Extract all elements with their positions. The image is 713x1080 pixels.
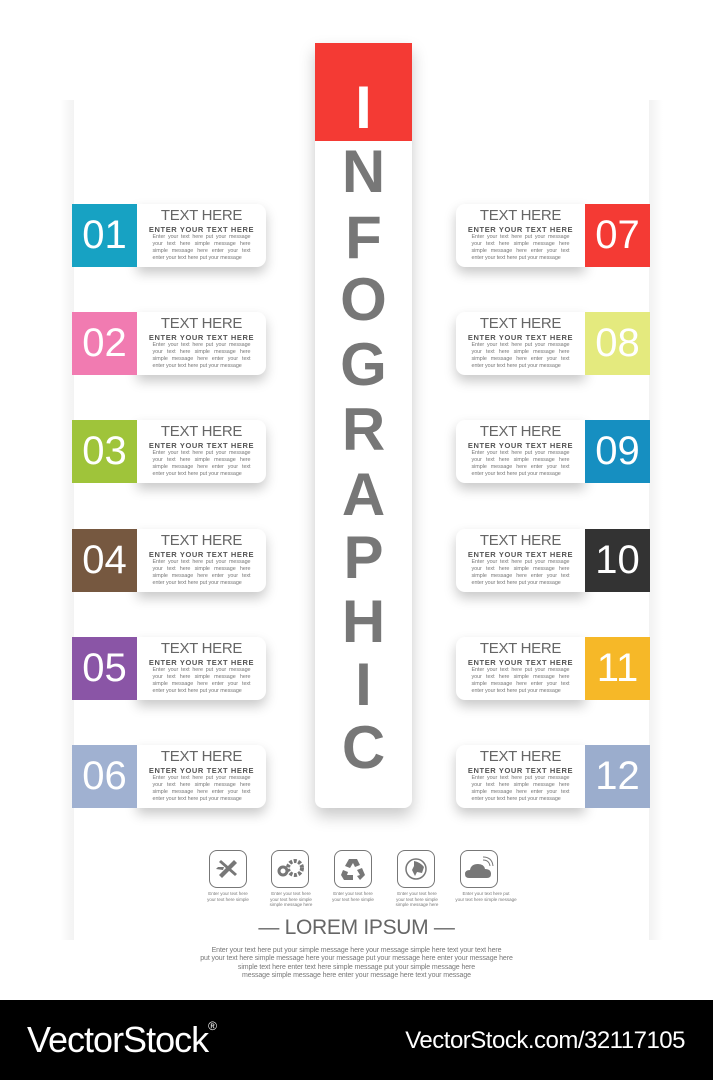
item 10: 10 xyxy=(595,538,640,582)
footer paragraph: simple text here enter text here simple message put your simple message here xyxy=(238,964,475,971)
item 12: ENTER YOUR TEXT HERE xyxy=(468,766,573,775)
title letters: I xyxy=(355,74,372,141)
item 06: TEXT HERE xyxy=(161,748,242,765)
icon row: your text here simple xyxy=(270,896,312,902)
item 07: Enter your text here put your message your text here simple message here simple message here enter your text enter your text here put your message xyxy=(472,234,570,261)
side shadows xyxy=(60,100,74,940)
item 01 xyxy=(72,204,272,279)
item 04: 04 xyxy=(82,538,127,582)
item 03: ENTER YOUR TEXT HERE xyxy=(149,441,254,450)
red header xyxy=(315,43,412,141)
item 05 xyxy=(72,637,272,712)
title column xyxy=(315,43,412,808)
item 01: Enter your text here put your message your text here simple message here simple message here enter your text enter your text here put your message xyxy=(152,234,250,261)
icon row: Enter your text here xyxy=(271,891,311,896)
title letters: R xyxy=(342,396,385,463)
item 08: ENTER YOUR TEXT HERE xyxy=(468,333,573,342)
item 03 xyxy=(72,420,272,495)
icon row: your text here simple message xyxy=(455,896,517,902)
item 07: 07 xyxy=(595,213,640,257)
item 08: Enter your text here put your message your text here simple message here simple message here enter your text enter your text here put your message xyxy=(472,342,570,369)
item 10: Enter your text here put your message your text here simple message here simple message here enter your text enter your text here put your message xyxy=(472,559,570,586)
item 09: Enter your text here put your message your text here simple message here simple message here enter your text enter your text here put your message xyxy=(472,450,570,477)
icon: gears xyxy=(271,850,309,888)
item 04: Enter your text here put your message your text here simple message here simple message here enter your text enter your text here put your message xyxy=(152,559,250,586)
title letters: A xyxy=(342,461,385,528)
item 03: 03 xyxy=(82,429,127,473)
item 12: TEXT HERE xyxy=(480,748,561,765)
footer paragraph: message simple message here enter your message here text your message xyxy=(242,972,471,979)
item 04 xyxy=(72,529,272,604)
title letters: O xyxy=(340,266,387,333)
item 09: 09 xyxy=(595,429,640,473)
item 05: ENTER YOUR TEXT HERE xyxy=(149,658,254,667)
item 01: TEXT HERE xyxy=(161,207,242,224)
item 01: ENTER YOUR TEXT HERE xyxy=(149,225,254,234)
title letters: H xyxy=(342,588,385,655)
item 11: 11 xyxy=(597,646,638,690)
item 09 xyxy=(450,420,650,495)
title letters: C xyxy=(342,714,385,781)
watermark band xyxy=(0,1000,713,1080)
text: simple message here xyxy=(396,902,438,907)
item 03: Enter your text here put your message your text here simple message here simple message here enter your text enter your text here put your message xyxy=(152,450,250,477)
footer paragraph: put your text here simple message here your message put your message here enter your message here xyxy=(200,955,513,962)
item 02: 02 xyxy=(82,321,127,365)
item 02: Enter your text here put your message your text here simple message here simple message here enter your text enter your text here put your message xyxy=(152,342,250,369)
item 08 xyxy=(450,312,650,387)
icon: globe xyxy=(397,850,435,888)
icon row: your text here simple xyxy=(396,896,438,902)
item 12: Enter your text here put your message your text here simple message here simple message here enter your text enter your text here put your message xyxy=(472,775,570,802)
text: simple message here xyxy=(270,902,312,907)
item 06: ENTER YOUR TEXT HERE xyxy=(149,766,254,775)
item 02 xyxy=(72,312,272,387)
item 07: ENTER YOUR TEXT HERE xyxy=(468,225,573,234)
icon row: your text here simple xyxy=(207,896,249,902)
icon row xyxy=(207,850,517,907)
icon: plane xyxy=(209,850,247,888)
item 08: TEXT HERE xyxy=(480,315,561,332)
watermark band: VectorStock.com/32117105 xyxy=(405,1027,685,1054)
item 06: Enter your text here put your message your text here simple message here simple message here enter your text enter your text here put your message xyxy=(152,775,250,802)
item 01: 01 xyxy=(82,213,127,257)
item 03: TEXT HERE xyxy=(161,423,242,440)
title letters: N xyxy=(342,138,385,205)
item 06: 06 xyxy=(82,754,127,798)
item 11 xyxy=(450,637,650,712)
item 11: Enter your text here put your message your text here simple message here simple message here enter your text enter your text here put your message xyxy=(472,667,570,694)
icon row: Enter your text here xyxy=(208,891,248,896)
title letters: P xyxy=(343,524,384,591)
item 04: ENTER YOUR TEXT HERE xyxy=(149,550,254,559)
item 12 xyxy=(450,745,650,820)
footer paragraph: Enter your text here put your simple message here your message simple here text your text here xyxy=(212,947,501,954)
item 11: ENTER YOUR TEXT HERE xyxy=(468,658,573,667)
icon row: Enter your text here xyxy=(333,891,373,896)
title letters xyxy=(340,74,387,781)
icon row: Enter your text here xyxy=(397,891,437,896)
item 09: ENTER YOUR TEXT HERE xyxy=(468,441,573,450)
watermark band: VectorStock® xyxy=(27,1019,216,1060)
item 10: ENTER YOUR TEXT HERE xyxy=(468,550,573,559)
item 05: Enter your text here put your message your text here simple message here simple message here enter your text enter your text here put your message xyxy=(152,667,250,694)
heading: lorem ipsum: — LOREM IPSUM — xyxy=(258,916,455,939)
item 05: 05 xyxy=(82,646,127,690)
icon row: your text here simple xyxy=(332,896,374,902)
icon row: Enter your text here put xyxy=(462,891,510,896)
item 08: 08 xyxy=(595,321,640,365)
icon: recycle xyxy=(334,850,372,888)
title letters: G xyxy=(340,331,387,398)
footer paragraph xyxy=(200,946,513,979)
item 05: TEXT HERE xyxy=(161,640,242,657)
item 02: ENTER YOUR TEXT HERE xyxy=(149,333,254,342)
item 11: TEXT HERE xyxy=(480,640,561,657)
item 12: 12 xyxy=(595,754,640,798)
item 06 xyxy=(72,745,272,820)
title letters: I xyxy=(355,651,372,718)
icon: cloud xyxy=(460,850,498,888)
item 04: TEXT HERE xyxy=(161,532,242,549)
item 09: TEXT HERE xyxy=(480,423,561,440)
item 02: TEXT HERE xyxy=(161,315,242,332)
item 10: TEXT HERE xyxy=(480,532,561,549)
item 07: TEXT HERE xyxy=(480,207,561,224)
title letters: F xyxy=(345,204,382,271)
item 10 xyxy=(450,529,650,604)
item 07 xyxy=(450,204,650,279)
